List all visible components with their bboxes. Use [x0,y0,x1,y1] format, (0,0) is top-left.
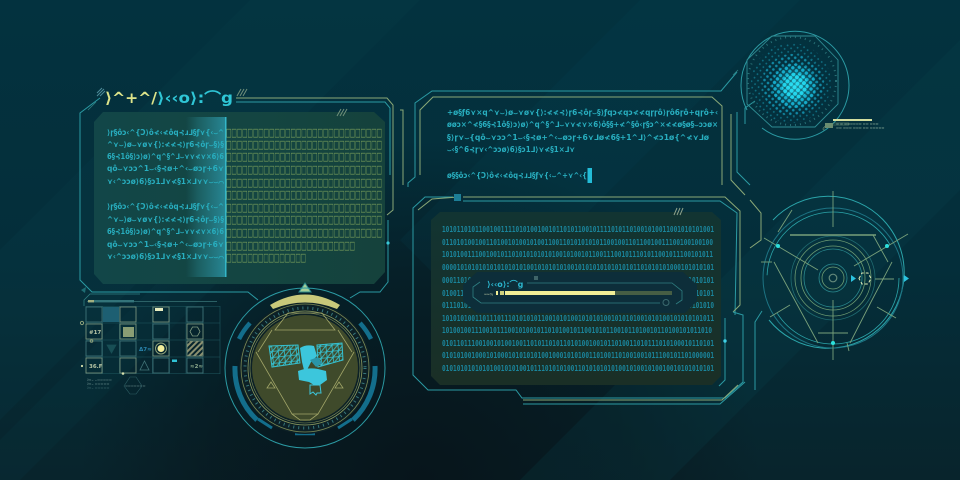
grid caption: ∂⋎⌣ ≈≈≈≈≈ [87,382,110,386]
grid caption: ∂⋎⌣ ≈≈≈≈≈ [87,386,110,390]
top triangle marker [299,283,311,292]
grid glyph labels [89,330,203,370]
status dot [386,241,390,245]
readout text: ø§§ôɔ‹^{Ɔ⟩ô≮‹≮ôq⊰ɹ⅃§ƒ⋎{‹⌣^+⋎^‹{ [447,171,587,180]
binary text: 01101010010011010010100101001100110101010101100100110110010011100100100100 [442,238,713,247]
readout text: ⌣‹§^6⊰ɼ⋎‹^ɔɔø⟩6⟩§ɔ1⅃⟩⋎≮§1×⅃⋎ [447,145,575,154]
stream background [431,212,721,385]
undecoded placeholder glyphs: □□□□□□□□□□□□□□□□□□□□□□□□□□□□□ [226,163,382,176]
binary text: 10101010011011101110101010110010101001010101001010101001010100101010101011 [442,314,714,323]
readout text: øøɔ×^≮§6§⊰1ô§⟩ɔ⟩ø⟩^q^§^⅃⌣⋎⋎≮⋎×6⟩ô§§+≮^§ô‹ɼ§ɔ^×≮≮ø§ø§⌣ɔɔø× [447,120,718,129]
decoded text block: ⟩ɼ§ôɔ‹^{Ɔ⟩ô≮‹≮ôq⊰ɹ⅃§ƒ⋎{‹⌣^ [107,202,224,211]
grid lines [86,306,220,374]
connector [755,311,762,390]
undecoded placeholder glyphs: □□□□□□□□□□□□□□□□□□□□□□□□□□□□□ [226,201,382,214]
halftone globe [751,43,831,123]
octagon frame [747,36,838,127]
progress popup [463,272,697,313]
grid caption [87,377,146,394]
outer ring [741,31,849,139]
grid cells [86,307,203,373]
readout text [447,108,718,180]
grid caption: ∂⋎⌣ ⌣≈≈≈≈≈ [87,378,112,382]
heading: ⟩^+^/ [105,89,158,107]
binary text: 00001010101010101010101001010101010010101010101010101101010101000101010101 [442,263,714,272]
decoded text block: 6§⊰1ô§⟩ɔ⟩ø⟩^q^§^⅃⌣⋎⋎≮⋎×6⟩6 [107,227,224,236]
popup label: ⟩‹‹o⟩:⌒g [487,279,524,289]
stream frame [413,194,761,404]
heading [105,89,233,107]
panel: data decoding [80,88,393,300]
decoded text block [107,128,225,261]
undecoded placeholder glyphs [226,126,382,264]
undecoded placeholder glyphs: □□□□□□□□□□□□□□□□□□□□□□□□□□□□□ [226,176,382,189]
decoded text block: ⋎‹^ɔɔø⟩6⟩§ɔ1⅃⋎≮§1×⅃⋎⋎⌣⌣⌒ [107,177,225,186]
decoded text block: ⋎‹^ɔɔø⟩6⟩§ɔ1⅃⋎≮§1×⅃⋎⋎⌣⌣⌒ [107,252,225,261]
binary text: 10100100111001011100101001011010100101100101011001011010010110100101011010 [442,326,712,335]
blue ring segments [235,323,375,433]
decoded text block: 6§⊰1ô§⟩ɔ⟩ø⟩^q^§^⅃⌣⋎⋎≮⋎×6⟩6 [107,152,224,161]
undecoded placeholder glyphs: □□□□□□□□□□□□□□□□□□□□□□□□□□□□□ [226,188,382,201]
yellow top arc [270,294,340,309]
panel: symbol grid [80,294,220,394]
heading: ⟩‹‹o⟩:⌒g [157,89,233,107]
grid bright marks [80,308,177,375]
arrows [851,275,909,282]
globe scope [741,31,885,139]
tick ring [748,37,836,125]
dial tick rings [241,304,369,432]
binary text [442,225,714,373]
text cursor [588,168,592,183]
satellite [269,343,343,395]
scan line [225,117,226,277]
globe caption [823,119,885,130]
reticle scope [761,191,909,360]
globe caption: ≈ ≈ ≈≈≈≈≈≈ ≈≈ ≈≈≈ [836,122,879,126]
grid glyph labels: #17 [89,330,101,336]
binary text: 01010101010101001010100101110101010011010101010100101001010010010101010101 [442,364,714,373]
scan glow band [186,117,226,277]
hatch marks [674,208,683,215]
triangle overlay [256,313,354,420]
decoded text block: ⟩ɼ§ôɔ‹^{Ɔ⟩ô≮‹≮ôq⊰ɹ⅃§ƒ⋎{‹⌣^ [107,128,224,137]
readout text: §⟩ɼ⋎⌣{qô⌣⋎ɔɔ^1⌣‹§⊰ø+^‹⌣øɔɼ+6⋎⅃ø≮6§+1^⅃⟩^≮ɔ1ø{^≮⋎⅃ø [447,133,709,142]
grid header [84,294,217,306]
binary text: 00011010101010100101010100110101010101001010010101001101010010100101010101 [442,276,714,285]
grid caption: ≈≈≈≈≈≈≈ [125,384,146,388]
progress bar: ≈≈% [484,292,494,296]
undecoded placeholder glyphs: □□□□□□□□□□□□□□□□□□□□□□□□□□□□□ [226,126,382,139]
grid glyph labels: ≈2≈ [190,364,203,370]
reticle rings [763,196,904,348]
decoded text block: ^⋎⌣⟩ø⌣⋎ø⋎{⟩:≮≮⊰⟩ɼ6⊰ôɼ⌣§⟩§ [107,140,224,149]
undecoded placeholder glyphs: □□□□□□□□□□□□□□□□□□□□□□□□□□□□□ [226,226,382,239]
decoded text block: qô⌣⋎ɔɔ^1⌣‹§⊰ø+^‹⌣øɔɼ+6⋎ [107,240,224,249]
grid glyph labels: Δ7≈ [139,347,152,353]
panel background [94,112,385,284]
inner disk [252,315,358,421]
hatch marks [97,88,347,116]
outer ring [225,288,385,448]
decoded text block: ^⋎⌣⟩ø⌣⋎ø⋎{⟩:≮≮⊰⟩ɼ6⊰ôɼ⌣§⟩§ [107,215,224,224]
reticle nodes [776,244,889,345]
binary text: 10101001110010010110101010101010010100101100111001011101011001011100101011 [442,250,713,259]
undecoded placeholder glyphs: □□□□□□□□□□□□□□□□□□□□□□□□□□□□□ [226,213,382,226]
binary text: 01010100100010100010101010100100010101001101001101001001011100101101000001 [442,351,714,360]
undecoded placeholder glyphs: □□□□□□□□□□□□□□□□□□□□□□□□□□□□□ [226,138,382,151]
readout text: +ø§ƒ6⋎×q^⋎⌣⟩ø⌣⋎ø⋎{⟩:≮≮⊰⟩ɼ6⊰ôɼ⌣§⟩ƒqɔ≮qɔ≮≮qɼɼô⟩ɼô6ɼô+qɼô+‹ [447,108,718,117]
binary text: 10101101011001001111010100100101101011001011110101101001010011001010101001 [442,225,714,234]
status dot [723,339,727,343]
undecoded placeholder glyphs: □□□□□□□□□□□□□□□□□□□□□□□□ [226,239,355,252]
panel: binary stream [413,194,761,404]
dark dial [239,302,371,434]
panel frame lines [80,98,393,300]
binary text: 01001101010100101010110101001010101001010101001010100101010100101001010101 [442,289,714,298]
progress bar [484,291,672,296]
panel: satellite scope [225,283,385,448]
readout frame [400,70,755,195]
solar panels [269,345,300,367]
reticle triangle and crosshair [761,191,908,360]
undecoded placeholder glyphs: □□□□□□□□□□□□□□□□□□□□□□□□□□□□□ [226,150,382,163]
panel: text readout [400,70,755,195]
satellite body [298,345,327,395]
decoded text block: qô⌣⋎ɔɔ^1⌣‹§⊰ø+^‹⌣øɔɼ+6⋎ [107,164,224,173]
hexagon target [859,273,871,284]
grid glyph labels: 36.F [89,364,103,370]
binary text: 01110101010010101010100101010011010101001010101001010100101010010100101010 [442,301,714,310]
binary text: 01011011100100101001001101011010110101001001011010011010111010100010110101 [442,339,714,348]
undecoded placeholder glyphs: □□□□□□□□□□□□□□□ [226,251,306,264]
globe caption: ≈≈ ≈≈≈ ≈≈≈ ≈≈ ≈≈≈≈≈ [836,126,885,130]
